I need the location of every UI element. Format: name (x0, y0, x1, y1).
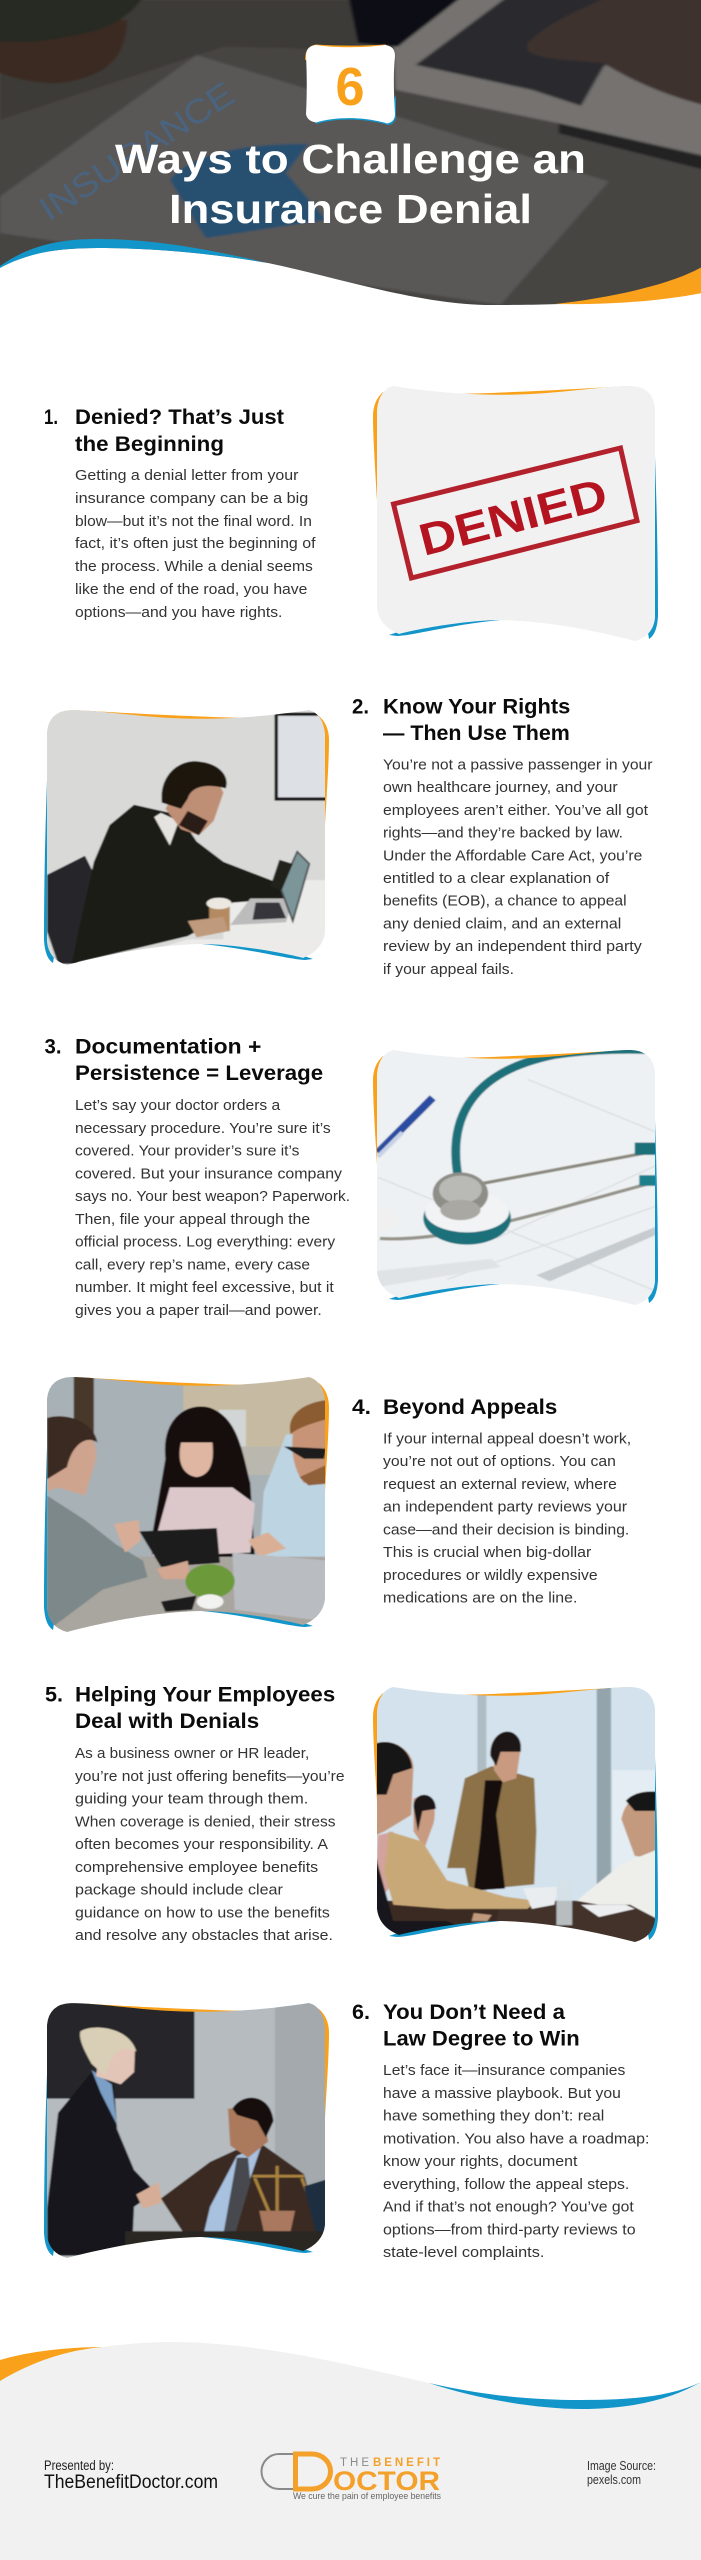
section 3 text: number. It might feel excessive, but it (75, 1279, 335, 1296)
footer panel (0, 2342, 701, 2560)
section 4 text: This is crucial when big-dollar (383, 1544, 591, 1561)
footer blue accent (429, 2382, 701, 2409)
orange wave accent (555, 267, 701, 304)
section 1 text: insurance company can be a big (75, 490, 308, 507)
section 4 text: medications are on the line. (383, 1590, 577, 1607)
image card: lawyer handshake (40, 1999, 335, 2260)
image card: man at laptop (40, 703, 335, 972)
section 4 text: case—and their decision is binding. (383, 1521, 629, 1538)
section 1 text: fact, it’s often just the beginning of (75, 535, 316, 552)
header banner (0, 0, 701, 380)
section 1 text: blow—but it’s not the final word. In (75, 513, 312, 530)
section 5 text (45, 1683, 344, 1944)
section 3 text: Documentation + (75, 1035, 261, 1059)
image source: Image Source: (587, 2459, 656, 2473)
number badge (305, 44, 396, 125)
section 3 text: covered. But your insurance company (75, 1165, 343, 1182)
watermark word on paper: INSURANCE (33, 75, 241, 229)
presented by (44, 2458, 218, 2493)
section 6 text: have a massive playbook. But you (383, 2085, 621, 2102)
image card: meeting with clipboard (40, 1373, 335, 1638)
section 2 text: You’re not a passive passenger in your (383, 756, 652, 773)
section 5 text: you’re not just offering benefits—you’re (75, 1768, 344, 1785)
section 4 text: procedures or wildly expensive (383, 1567, 598, 1584)
image card: boardroom meeting (371, 1684, 662, 1946)
section 6 text: state-level complaints. (383, 2244, 544, 2261)
section 2 text: benefits (EOB), a chance to appeal (383, 893, 627, 910)
section 2 text: own healthcare journey, and your (383, 779, 618, 796)
section 1 text: the process. While a denial seems (75, 558, 313, 575)
footer grey wave (0, 2342, 701, 2560)
section 5 text: guidance on how to use the benefits (75, 1904, 330, 1921)
section 5 text: When coverage is denied, their stress (75, 1813, 336, 1830)
section 1 text (44, 405, 316, 621)
section 1 text: 1. (44, 405, 58, 429)
section 3 text: gives you a paper trail—and power. (75, 1302, 322, 1319)
image source (587, 2459, 656, 2487)
section 2 text: Know Your Rights (383, 694, 570, 718)
logo: BENEFIT (373, 2457, 440, 2469)
title: Ways to Challenge an (115, 136, 586, 182)
section 1 text: Denied? That’s Just (75, 405, 284, 429)
blue wave accent (0, 239, 268, 268)
section 3 text: covered. Your provider’s sure it’s (75, 1143, 299, 1160)
section 2 text: — Then Use Them (383, 721, 570, 745)
section 6 text: Law Degree to Win (383, 2027, 580, 2051)
section 6 text: Let’s face it—insurance companies (383, 2062, 625, 2079)
section 6 text: motivation. You also have a roadmap: (383, 2130, 649, 2147)
section 6 text: everything, follow the appeal steps. (383, 2176, 629, 2193)
section 5 text: package should include clear (75, 1882, 283, 1898)
section 3 text: necessary procedure. You’re sure it’s (75, 1120, 331, 1137)
section 1 text: options—and you have rights. (75, 604, 282, 621)
presented by: TheBenefitDoctor.com (44, 2472, 218, 2493)
section 6 text: You Don’t Need a (383, 2000, 566, 2024)
header photo background (0, 0, 701, 320)
section 3 text: call, every rep’s name, every case (75, 1256, 310, 1273)
section 6 text: options—from third-party reviews to (383, 2221, 636, 2238)
section 4 text: Beyond Appeals (383, 1395, 557, 1419)
section 4 text (352, 1395, 631, 1607)
section 5 text: comprehensive employee benefits (75, 1859, 318, 1876)
section 4 text: you’re not out of options. You can (383, 1453, 616, 1470)
section 1 text: the Beginning (75, 432, 224, 456)
image card: denied stamp (370, 380, 665, 650)
section 3 text: official process. Log everything: every (75, 1234, 336, 1251)
section 4 text: If your internal appeal doesn’t work, (383, 1430, 631, 1448)
white wave (0, 248, 701, 380)
section 3 text: Let’s say your doctor orders a (75, 1097, 281, 1114)
image card: denied stamp: DENIED (414, 468, 612, 566)
section 4 text: request an external review, where (383, 1476, 617, 1493)
section 6 text (352, 2000, 649, 2261)
section 6 text: have something they don’t: real (383, 2108, 604, 2124)
footer orange accent (0, 2347, 103, 2381)
section 1 text: Getting a denial letter from your (75, 467, 298, 484)
logo: We cure the pain of employee benefits (293, 2491, 441, 2502)
section 2 text: review by an independent third party (383, 938, 642, 955)
section 5 text: often becomes your responsibility. A (75, 1836, 328, 1853)
section 2 text: any denied claim, and an external (383, 915, 621, 932)
section 3 text: Persistence = Leverage (75, 1061, 323, 1085)
section 5 text: Helping Your Employees (75, 1683, 335, 1707)
section 1 text: like the end of the road, you have (75, 581, 307, 598)
section 5 text: 5. (45, 1683, 63, 1707)
section 6 text: 6. (352, 2000, 370, 2024)
section 3 text: 3. (44, 1035, 62, 1059)
section 5 text: guiding your team through them. (75, 1790, 308, 1808)
section 4 text: 4. (352, 1395, 371, 1419)
logo: THE (340, 2457, 369, 2469)
section 3 text: Then, file your appeal through the (75, 1211, 310, 1228)
image card: stethoscope (367, 1047, 662, 1308)
section 5 text: As a business owner or HR leader, (75, 1745, 309, 1762)
section 3 text (44, 1035, 350, 1319)
logo (262, 2454, 441, 2502)
number badge: 6 (336, 57, 364, 117)
logo: OCTOR (333, 2466, 440, 2496)
section 6 text: know your rights, document (383, 2153, 578, 2170)
section 2 text: if your appeal fails. (383, 961, 514, 978)
section 2 text: Under the Affordable Care Act, you’re (383, 847, 642, 864)
section 5 text: Deal with Denials (75, 1709, 259, 1733)
title (115, 136, 586, 232)
section 4 text: an independent party reviews your (383, 1499, 627, 1516)
section 5 text: and resolve any obstacles that arise. (75, 1927, 333, 1944)
title: Insurance Denial (169, 186, 532, 232)
section 3 text: says no. Your best weapon? Paperwork. (75, 1188, 350, 1205)
image source: pexels.com (587, 2473, 641, 2487)
section 6 text: And if that’s not enough? You’ve got (383, 2198, 635, 2216)
section 2 text (352, 694, 652, 978)
section 2 text: employees aren’t either. You’ve all got (383, 802, 649, 819)
section 2 text: entitled to a clear explanation of (383, 870, 610, 887)
section 2 text: rights—and they’re backed by law. (383, 824, 623, 842)
presented by: Presented by: (44, 2458, 114, 2473)
section 2 text: 2. (352, 694, 369, 718)
